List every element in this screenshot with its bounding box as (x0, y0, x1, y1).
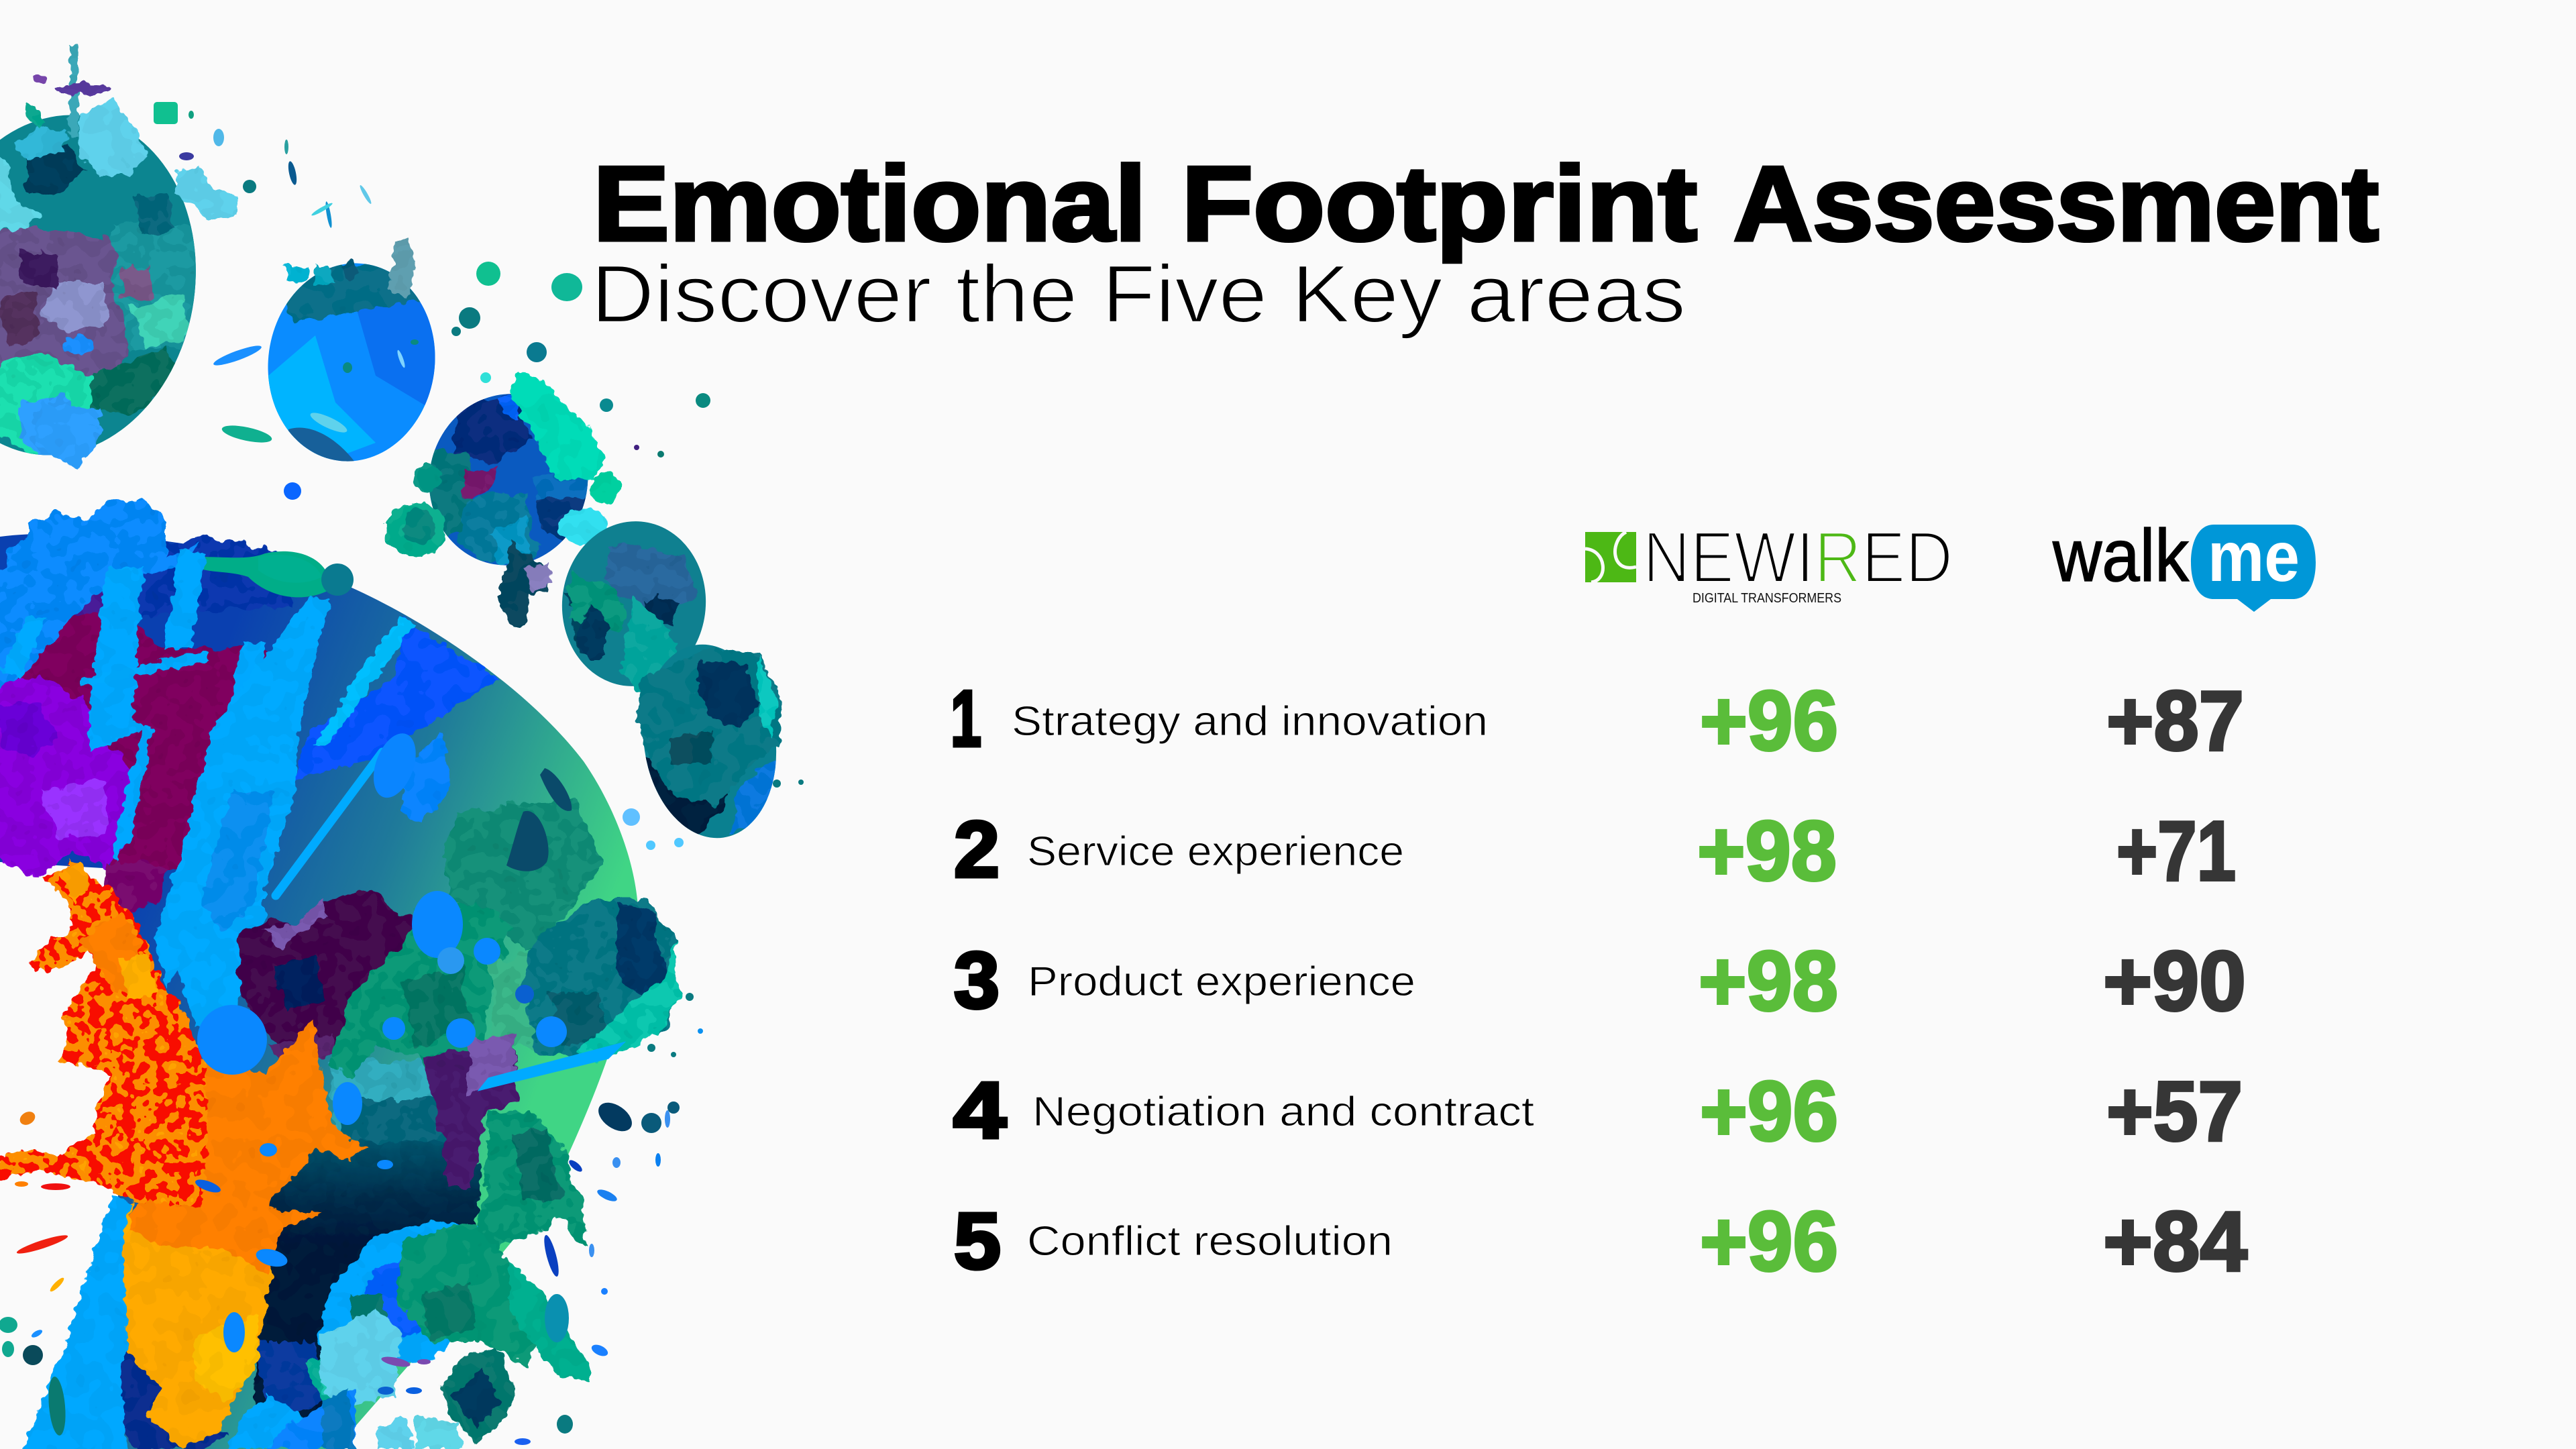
third toe (385, 370, 621, 627)
lower blue and green splashes (20, 1194, 590, 1449)
wordmark me: me (2208, 517, 2300, 596)
logo: Newired (1585, 517, 1953, 606)
dark blots on green (366, 728, 572, 871)
row label: Negotiation and contract (1032, 1089, 1534, 1135)
second toe (262, 238, 443, 466)
row label: Strategy and innovation (1012, 698, 1488, 745)
upper sole colour washes (0, 500, 295, 912)
thin streak (276, 752, 382, 896)
WalkMe score: +84 (2103, 1194, 2247, 1289)
row number: 2 (954, 805, 1000, 894)
WalkMe score: +71 (2116, 804, 2236, 898)
row 5 (954, 1194, 2247, 1289)
fifth toe (635, 644, 782, 839)
WalkMe score: +90 (2103, 934, 2246, 1028)
WalkMe score: +87 (2106, 674, 2244, 768)
logo: WalkMe (2052, 515, 2316, 612)
blue dots (333, 891, 617, 1125)
navy bottom wash (114, 1127, 483, 1449)
blue paint streaks (0, 550, 500, 1026)
big toe (0, 44, 236, 470)
row label: Service experience (1027, 828, 1404, 875)
orange paint splat (0, 859, 367, 1449)
subtitle: Discover the Five Key areas (591, 248, 1686, 339)
speech bubble (2191, 525, 2316, 612)
wordmark walk: walk (2052, 515, 2190, 597)
title: Emotional (593, 145, 1146, 263)
title: Footprint (1181, 145, 1697, 263)
Newired score: +98 (1697, 804, 1837, 898)
WalkMe score: +57 (2106, 1064, 2243, 1159)
row 4 (953, 1064, 2243, 1159)
row 2 (954, 804, 2236, 898)
Newired score: +96 (1700, 1064, 1838, 1159)
sole base shape (0, 533, 639, 1449)
green bottle splash (197, 551, 354, 597)
small splatter droplets (0, 140, 804, 1445)
row number: 1 (951, 674, 981, 763)
title: Assessment (1733, 145, 2379, 263)
wordmark: NEWIRED (1643, 517, 1953, 598)
fourth toe (562, 521, 706, 692)
logo mark (1585, 532, 1636, 582)
title (593, 145, 2379, 263)
mid sole blobs (239, 798, 679, 1261)
tagline: DIGITAL TRANSFORMERS (1693, 591, 1841, 606)
Newired score: +98 (1699, 934, 1838, 1028)
row number: 5 (954, 1197, 1001, 1286)
orange accents (194, 1005, 393, 1352)
row label: Conflict resolution (1027, 1218, 1393, 1265)
row number: 3 (954, 936, 1000, 1025)
row 3 (954, 934, 2246, 1028)
Newired score: +96 (1700, 1194, 1838, 1289)
footprint illustration (0, 44, 804, 1449)
Newired score: +96 (1700, 674, 1838, 768)
row label: Product experience (1028, 959, 1415, 1005)
row 1 (951, 674, 2244, 768)
row number: 4 (953, 1066, 1006, 1155)
